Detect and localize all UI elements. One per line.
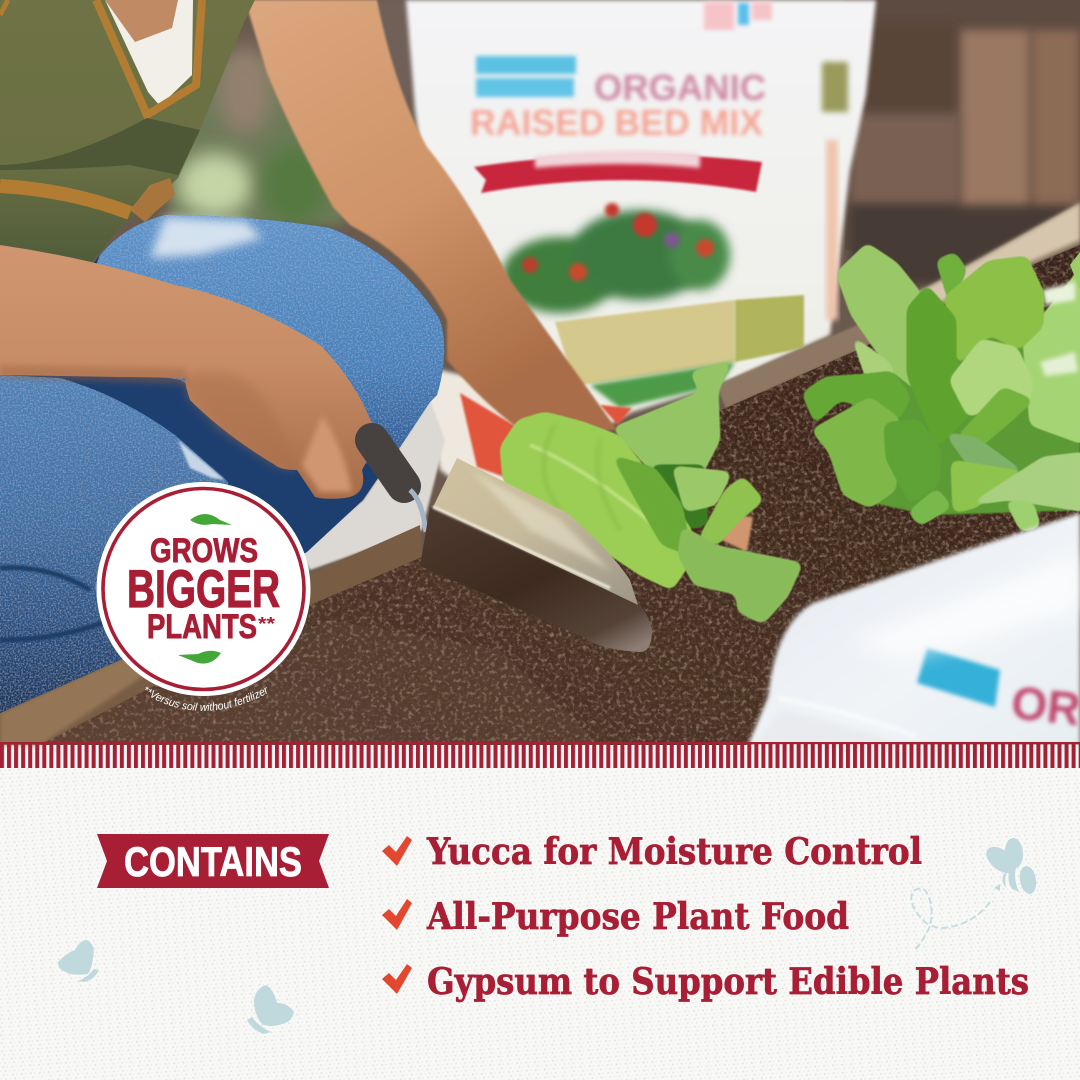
raised bed wood frame xyxy=(0,203,1080,745)
item: gypsum: Gypsum to Support Edible Plants xyxy=(427,961,1029,1003)
person: far arm xyxy=(245,0,617,430)
person: apron xyxy=(0,0,255,262)
lower leaves xyxy=(951,460,1026,513)
bag seam xyxy=(778,698,915,736)
small top leaf xyxy=(936,252,967,306)
round pale leaf xyxy=(949,339,1033,417)
person: jeans xyxy=(0,215,444,713)
leaf: right curl xyxy=(698,476,764,545)
leaf: top xyxy=(612,360,732,478)
apron: white shirt xyxy=(105,0,193,106)
soil bag in background xyxy=(300,0,876,570)
bag title text: RAISED BED MIX xyxy=(470,102,763,143)
checklist xyxy=(382,831,1029,1003)
trowel: silver upper blade xyxy=(433,458,638,605)
bag red ribbon xyxy=(474,155,762,193)
bag title text xyxy=(470,67,766,143)
jeans: sunlit patch on thigh xyxy=(150,217,262,258)
leaf: inner dark xyxy=(650,465,708,530)
bag illustration: flowers and planter xyxy=(502,203,804,408)
apron: skin at neckline xyxy=(105,0,178,42)
trowel: dark lower blade xyxy=(420,507,652,652)
jeans: lower leg xyxy=(0,375,235,713)
bag side print xyxy=(822,62,848,112)
bag title text: ORGANIC xyxy=(594,67,766,108)
leaf: centre fold xyxy=(612,455,692,556)
fabric panel xyxy=(0,755,1080,1080)
dark centre leaf xyxy=(884,419,941,504)
soil bed xyxy=(40,245,1080,745)
bag brand block xyxy=(476,2,772,97)
leaf: large left xyxy=(500,412,692,590)
apron: pocket stitching xyxy=(0,118,200,175)
item: all-purpose: All-Purpose Plant Food xyxy=(426,896,849,938)
bag brand block xyxy=(917,648,1000,707)
badge text: plants: PLANTS xyxy=(147,608,257,646)
apron: waist trim xyxy=(0,186,130,213)
leaf: large lower right xyxy=(678,526,803,624)
trowel: neck xyxy=(410,490,426,532)
jeans: dark base xyxy=(0,215,444,713)
large top right leaf xyxy=(944,256,1044,365)
lettuce: centre seedling xyxy=(500,360,803,624)
small left leaf xyxy=(802,371,911,424)
item: yucca: Yucca for Moisture Control xyxy=(426,831,922,873)
mid leaf xyxy=(957,387,1034,450)
pale grey-green leaf xyxy=(944,432,1024,479)
blurred background: wall and greenery xyxy=(0,0,1080,745)
icon: butterfly bottom xyxy=(247,985,294,1034)
footnote: **Versus soil without fertilizer xyxy=(145,686,267,711)
badge text: bigger: BIGGER xyxy=(127,560,280,619)
soil bag in foreground xyxy=(748,513,1080,745)
photo: raised bed gardening scene xyxy=(0,0,1080,745)
leaf: right small xyxy=(672,466,732,512)
badge text: grows: GROWS xyxy=(150,532,258,570)
badge text: asterisks: ** xyxy=(258,614,275,634)
jeans: thigh xyxy=(60,215,444,470)
icon: bee with dashed trail xyxy=(911,837,1038,950)
stitched border xyxy=(0,742,1080,768)
trowel: handle xyxy=(372,440,404,486)
lettuce: right cluster xyxy=(802,243,1080,532)
icon: butterfly left xyxy=(58,940,99,982)
apron: tie knot xyxy=(130,178,175,222)
bag lower red print xyxy=(425,370,630,492)
tall pale leaf xyxy=(836,243,921,392)
lower left leaf xyxy=(811,397,899,508)
tall dark leaf xyxy=(907,285,972,448)
badge: grows bigger plants xyxy=(96,482,310,696)
contains banner: CONTAINS xyxy=(124,838,302,885)
jeans: highlight on knee curve xyxy=(178,440,225,480)
far right foliage xyxy=(1023,262,1080,445)
fingertip behind lettuce xyxy=(715,513,753,552)
icon: top leaf xyxy=(190,514,232,525)
person: forearm and hand xyxy=(0,245,378,499)
trowel: reflection line xyxy=(433,507,610,588)
apron: neckline trim xyxy=(96,0,202,115)
icon: bottom leaf xyxy=(178,651,221,664)
trowel xyxy=(372,440,652,652)
